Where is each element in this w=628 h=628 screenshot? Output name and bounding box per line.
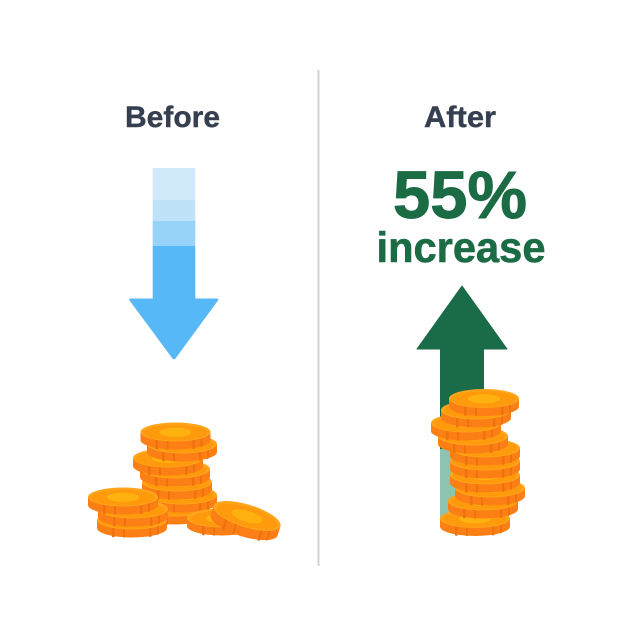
stat label: increase: increase	[376, 224, 546, 272]
heading: Before: Before	[125, 101, 220, 134]
right coins	[187, 495, 284, 546]
left coin stack	[88, 488, 168, 538]
stat: 55%: 55%	[393, 158, 527, 233]
icon: blue down arrow	[129, 168, 218, 359]
coins: after tall stack	[431, 389, 525, 536]
heading: After: After	[424, 101, 496, 134]
divider	[318, 70, 320, 566]
main coin stack	[133, 422, 217, 525]
coins: before piles	[88, 422, 284, 546]
icon: green up arrow	[417, 286, 507, 519]
